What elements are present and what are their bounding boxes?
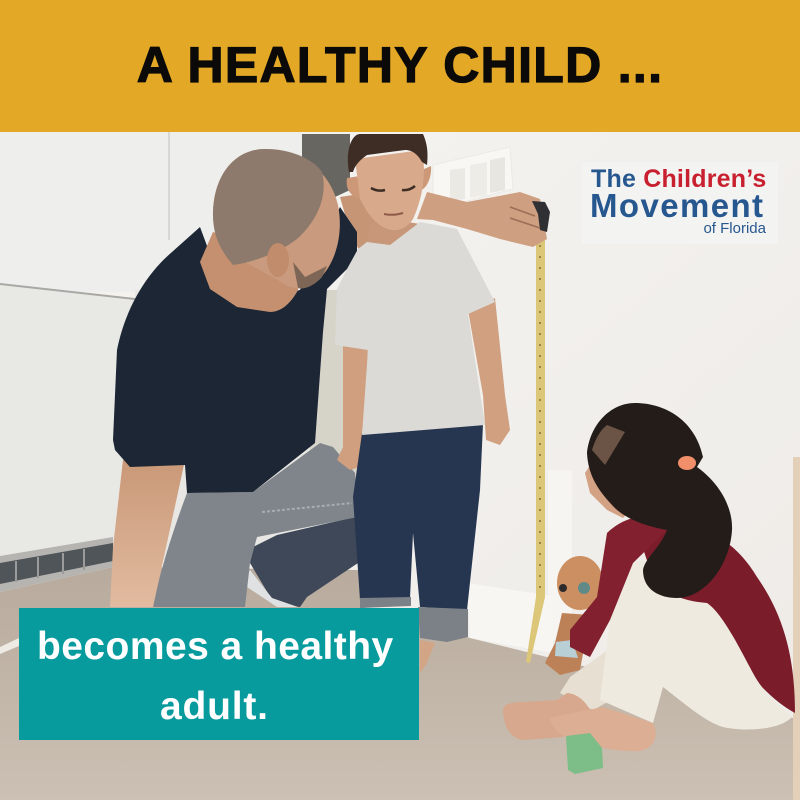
boy jean cuffs: [360, 597, 468, 642]
logo line 2: Movement: [590, 186, 764, 224]
father shoulder behind boy: [340, 192, 385, 256]
father beard: [293, 262, 327, 288]
left cabinet wall: [0, 132, 358, 560]
bright light on wall beside tape: [548, 470, 572, 640]
wood floor: [0, 567, 793, 800]
skirting board: [467, 583, 553, 653]
father's forearm and hand holding tape measure: [417, 192, 550, 247]
doll head: [557, 556, 603, 610]
baby doll: [545, 556, 603, 675]
father neck: [200, 232, 300, 312]
girl back leg: [560, 650, 630, 710]
logo: The Children's Movement of Florida: [582, 162, 778, 244]
boy bare foot: [420, 640, 435, 673]
girl hair highlight: [592, 425, 625, 465]
girl face: [585, 450, 640, 518]
father: [110, 149, 385, 607]
boy face: [355, 150, 424, 230]
father grey jeans: [153, 443, 358, 607]
father arm: [110, 460, 185, 607]
boy ears: [347, 166, 431, 198]
doll left eye: [559, 584, 567, 592]
father white sock: [245, 570, 298, 607]
father dark lower leg: [250, 517, 358, 607]
logo line 3: of Florida: [703, 220, 766, 237]
caption line 1: becomes a healthy: [37, 624, 394, 668]
boy left arm: [337, 345, 368, 470]
boy t-shirt: [335, 222, 495, 435]
girl: [503, 403, 795, 751]
girl maroon sleeve: [570, 518, 667, 657]
father ear: [267, 243, 289, 277]
light switch plate: [433, 147, 513, 210]
green toy block: [566, 733, 603, 774]
girl cream trousers: [600, 561, 792, 730]
father t-shirt: [113, 207, 357, 493]
logo line 1: The Children’s: [591, 165, 767, 193]
boy neck: [366, 222, 420, 246]
title: A HEALTHY CHILD ...: [137, 37, 663, 93]
girl maroon sweater back: [633, 518, 795, 713]
boy right arm: [468, 298, 510, 445]
title banner: [0, 0, 800, 132]
right edge wooden strip: [793, 457, 800, 800]
boy closed eyes: [371, 186, 415, 191]
girl hair and ponytail: [587, 403, 732, 598]
doll nappy: [555, 640, 578, 658]
caption line 2: adult.: [160, 684, 269, 728]
boy mouth: [384, 213, 403, 215]
caption box: [19, 608, 419, 740]
doll body: [545, 613, 590, 675]
girl near foot: [550, 707, 656, 751]
father head: [213, 149, 340, 288]
boy hair: [348, 134, 428, 172]
girl far foot: [503, 693, 590, 740]
boy jeans: [353, 424, 483, 610]
doll right eye: [578, 582, 590, 594]
floor vent: [0, 537, 113, 592]
hair tie: [678, 456, 696, 470]
tape measure case: [532, 201, 550, 232]
tape measure: [526, 240, 545, 663]
boy: [335, 134, 510, 673]
father cropped hair: [213, 149, 324, 265]
